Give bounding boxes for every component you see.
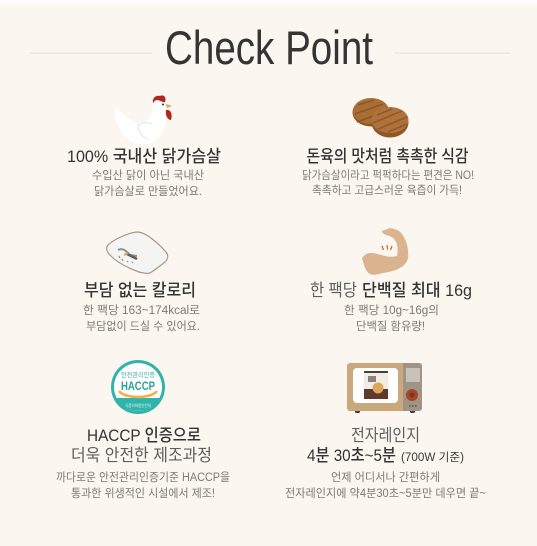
panel: domestic chicken <box>67 95 221 198</box>
description: 한 팩당 10g~16g의 <box>344 304 439 317</box>
icon: scale <box>107 232 168 273</box>
description: 부담없이 드실 수 있어요. <box>86 320 200 333</box>
description: 까다로운 안전관리인증기준 HACCP을 <box>56 471 230 484</box>
description <box>302 168 474 197</box>
icon: microwave <box>347 363 422 413</box>
heading: HACCP 인증으로 <box>87 426 201 445</box>
description <box>56 471 230 500</box>
description: 통과한 위생적인 시설에서 제조! <box>71 487 215 500</box>
description: 한 팩당 163~174kcal로 <box>83 304 200 317</box>
icon: HACCP badge: 식품의약품안전처 <box>125 402 151 408</box>
heading: 부담 없는 칼로리 <box>84 281 196 300</box>
panel: protein <box>310 228 472 333</box>
icon: HACCP badge <box>111 360 165 414</box>
description <box>92 168 204 198</box>
description <box>344 304 439 333</box>
description: 촉촉하고 고급스러운 육즙이 가득! <box>312 183 462 197</box>
heading <box>310 281 472 300</box>
heading: 더욱 안전한 제조과정 <box>71 446 212 465</box>
icon: HACCP badge: HACCP <box>121 379 155 393</box>
icon: HACCP badge: 안전관리인증 <box>121 370 155 379</box>
icon: grilled patties <box>352 98 408 138</box>
icon: flexed arm <box>362 228 408 275</box>
description: 닭가슴살이라고 퍽퍽하다는 편견은 NO! <box>302 168 474 182</box>
panel: microwave <box>285 363 486 500</box>
heading: 한 팩당 <box>310 281 357 300</box>
description <box>285 470 486 500</box>
panel: moist texture <box>302 98 474 197</box>
title: Check Point <box>165 21 373 74</box>
description: 단백질 함유량! <box>356 320 425 333</box>
heading: 단백질 최대 16g <box>362 281 472 300</box>
heading <box>71 426 212 465</box>
icon: chicken <box>115 95 172 144</box>
heading: (700W 기준) <box>401 451 464 464</box>
description: 언제 어디서나 간편하게 <box>331 470 440 484</box>
heading: 전자레인지 <box>351 426 420 445</box>
description <box>83 304 200 333</box>
panel: low calorie <box>83 232 200 333</box>
description: 전자레인지에 약4분30초~5분만 데우면 끝~ <box>285 486 486 500</box>
panel: HACCP <box>56 360 230 500</box>
heading: 4분 30초~5분 <box>307 446 396 465</box>
description: 닭가슴살로 만들었어요. <box>94 184 202 198</box>
heading <box>307 426 464 465</box>
heading: 돈육의 맛처럼 촉촉한 식감 <box>306 147 469 166</box>
description: 수입산 닭이 아닌 국내산 <box>92 168 204 182</box>
heading: 100% 국내산 닭가슴살 <box>67 147 221 166</box>
